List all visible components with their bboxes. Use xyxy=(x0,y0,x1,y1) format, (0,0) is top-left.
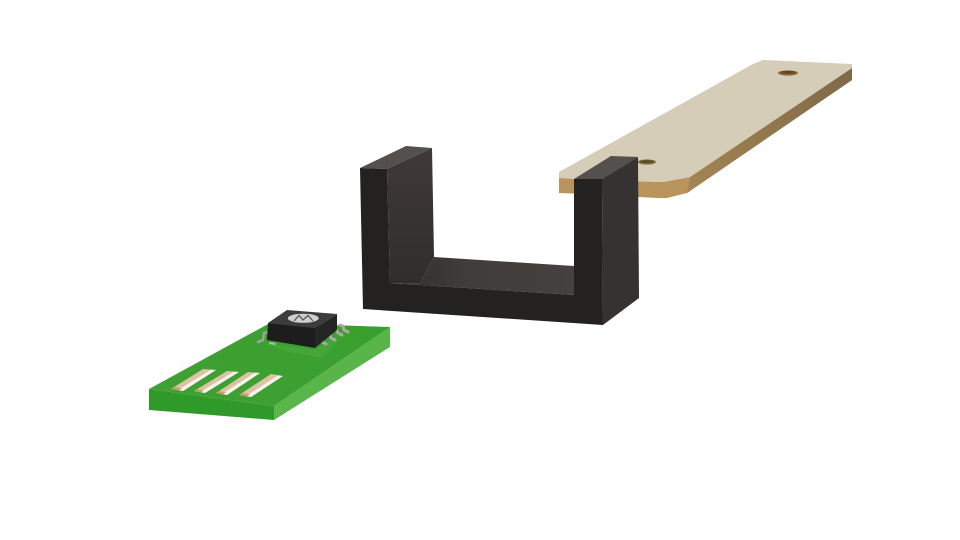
chip reflection xyxy=(262,335,337,358)
chip top xyxy=(268,310,337,328)
front face xyxy=(360,168,603,325)
pad 3 xyxy=(216,372,260,395)
pad 2 xyxy=(194,371,239,393)
PCB front edge xyxy=(149,389,274,420)
left pillar inner wall xyxy=(387,148,434,284)
mounting hole: near xyxy=(638,159,656,165)
PCB top surface xyxy=(149,323,390,406)
black U-shaped housing xyxy=(360,146,639,325)
channel floor xyxy=(390,257,574,295)
laminate board xyxy=(559,60,852,198)
chip logo xyxy=(288,314,319,323)
contact pads xyxy=(171,369,283,397)
green PCB with chip xyxy=(149,310,390,420)
chip pins xyxy=(258,325,348,344)
mounting hole: far xyxy=(778,70,798,76)
pad 1 xyxy=(171,369,216,391)
chip front xyxy=(267,323,315,348)
right pillar top xyxy=(574,156,638,179)
board edge xyxy=(559,68,852,198)
left pillar top xyxy=(360,146,432,169)
right pillar side xyxy=(602,157,639,325)
board top surface xyxy=(559,60,852,182)
chip side xyxy=(315,314,337,348)
PCB side edge xyxy=(274,327,390,420)
SOIC chip body xyxy=(267,310,337,348)
pad 4 xyxy=(239,374,283,397)
